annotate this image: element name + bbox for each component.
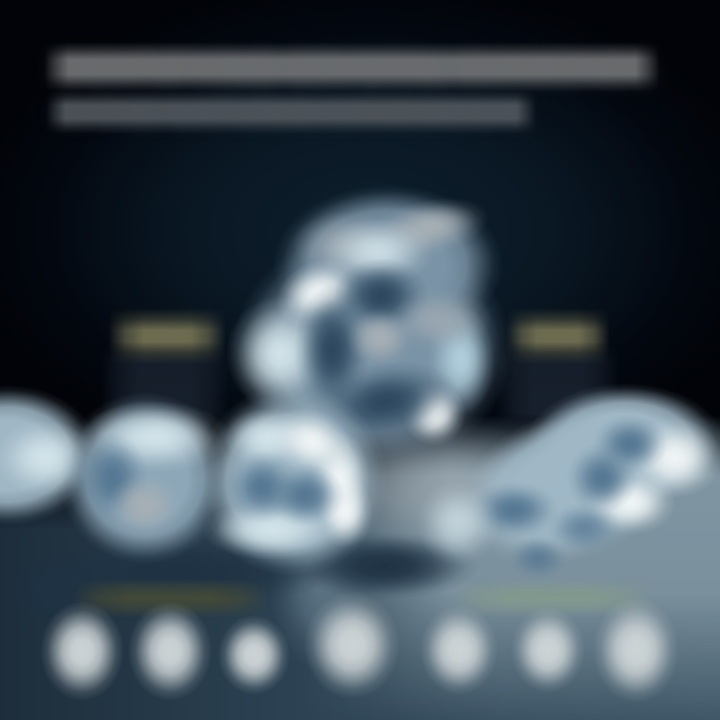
- title: [44, 42, 660, 134]
- bottom left gold caption: [81, 582, 256, 614]
- bottom right gold caption: [475, 585, 630, 610]
- bottom right gold caption: DIAMOND COLOUR: [466, 589, 639, 611]
- left diamond: [59, 392, 231, 564]
- gem 2: [128, 601, 212, 701]
- gem 6: [511, 607, 585, 693]
- gem 7: [593, 597, 679, 703]
- left gold label: [110, 310, 224, 362]
- left gold label: 2021: [135, 324, 199, 351]
- gem 1: [40, 601, 124, 701]
- gem 3: [218, 615, 290, 695]
- right diamond: [416, 375, 720, 595]
- right gold label: 2022: [530, 324, 586, 351]
- dark pedestals under labels: [108, 354, 612, 422]
- title line 2: IN THE NATURAL LANDSCAPE: [52, 96, 532, 134]
- far left diamond: [0, 385, 100, 525]
- reflective floor: [0, 415, 720, 720]
- lower centre diamond: [196, 384, 388, 576]
- large central diamond: [226, 185, 512, 470]
- bottom left gold caption: DIAMOND CLARITY: [85, 589, 254, 611]
- gem 4: [304, 591, 400, 699]
- gem 5: [420, 605, 498, 695]
- row of round gem swatches: [40, 591, 679, 703]
- crystal diamonds cluster: [0, 185, 720, 595]
- right gold label: [508, 310, 608, 362]
